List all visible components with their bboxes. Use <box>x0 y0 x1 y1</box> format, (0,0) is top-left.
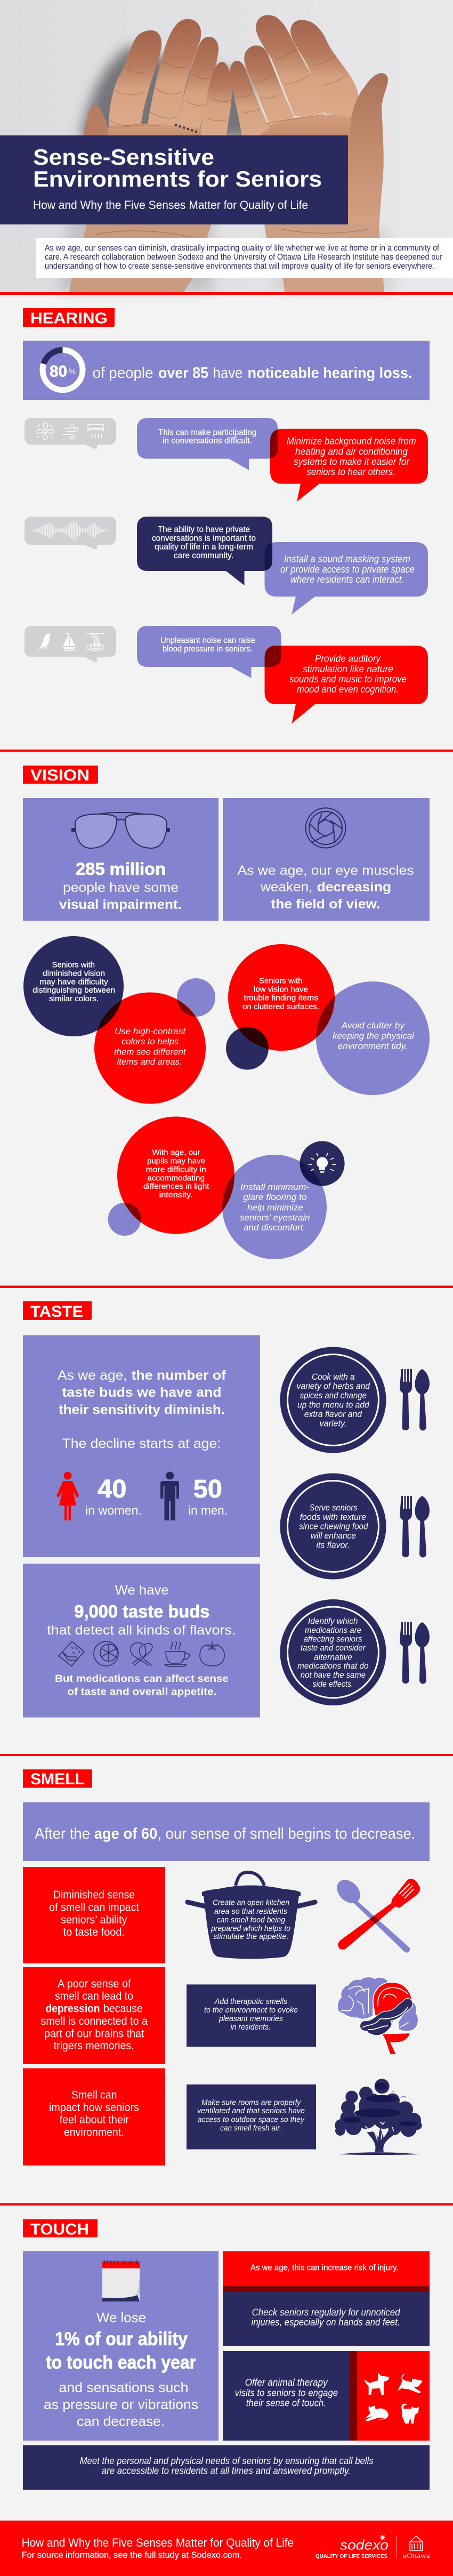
text: diminished vision: diminished vision <box>43 969 105 978</box>
panel: 1 percent per year: as pressure or vibrations <box>44 2396 198 2412</box>
stat: 50 in men: in men. <box>188 1503 228 1517</box>
text: diminished vision: may have difficulty <box>39 977 109 986</box>
logo: uOttawa: uOttawa <box>403 2551 430 2559</box>
box: ventilated rooms: access to outdoor space so they <box>198 2115 305 2124</box>
ring chart 80%: 80 <box>50 363 67 381</box>
plate: identify medications: affecting seniors <box>304 1635 362 1644</box>
circle: decorative navy <box>226 1027 269 1069</box>
panel: taste bud decline: the number of <box>132 1368 226 1383</box>
box: depression: because <box>103 2002 143 2015</box>
box: environment: Smell can <box>71 2089 117 2102</box>
panel: field of view: decreasing <box>317 880 391 895</box>
conversation 3 <box>137 626 428 723</box>
speech bubble: minimize background noise: systems to make it easier for <box>294 456 410 467</box>
panel: 9,000 taste buds: of taste and overall appetite. <box>67 1687 216 1697</box>
speech bubble: conversations difficult: in conversations difficult. <box>163 436 252 446</box>
text: avoid clutter: keeping the physical <box>333 1031 415 1041</box>
icon bubble: sound wave <box>25 517 116 550</box>
speech bubble: unpleasant noise <box>137 626 281 678</box>
icon: sunglasses <box>71 812 170 848</box>
plate: serve foods with texture: will enhance <box>311 1531 356 1541</box>
text: low vision: on cluttered surfaces. <box>242 1002 319 1011</box>
photo: aged hands <box>0 0 453 292</box>
box: environment: feel about their <box>60 2114 129 2126</box>
panel: taste bud decline: As we age, <box>58 1368 127 1383</box>
speech bubble: minimize background noise: heating and air conditioning <box>295 446 408 457</box>
box: depression: depression <box>46 2002 100 2015</box>
panel: field of view <box>223 798 430 921</box>
text: low vision <box>242 977 319 1011</box>
panel: call bells: Meet the personal and physical needs of seniors by ensuring that call bells <box>80 2456 374 2466</box>
speech bubble: auditory stimulation: Provide auditory <box>315 653 382 664</box>
panel: check seniors <box>223 2292 430 2346</box>
text: diminished vision: distinguishing between <box>33 986 115 995</box>
plate: cook with herbs: up the menu to add <box>297 1400 369 1410</box>
icon: aperture <box>306 808 345 848</box>
circle: decorative periwinkle <box>177 978 215 1017</box>
text: high-contrast colors: them see different <box>114 1047 187 1057</box>
text: minimum-glare flooring: glare flooring to <box>243 1192 307 1202</box>
panel: 9,000 taste buds <box>23 1564 260 1718</box>
box: taste food: seniors’ ability <box>61 1914 127 1926</box>
panel: taste bud decline: The decline starts at age: <box>62 1436 221 1451</box>
text: minimum-glare flooring: and discomfort. <box>244 1222 305 1233</box>
circle: high-contrast colors <box>94 993 206 1104</box>
stat: 50 in men <box>188 1475 228 1517</box>
box: environment: environment. <box>64 2127 124 2139</box>
ring chart 80% <box>43 350 83 390</box>
plate: identify medications: Identify which <box>308 1617 358 1626</box>
panel: 1 percent per year: can decrease. <box>77 2413 165 2429</box>
panel: risk of injury: As we age, this can increase risk of injury. <box>250 2264 399 2273</box>
stat: 40 in women: in women. <box>85 1503 142 1517</box>
pot with text: area so that residents <box>214 1907 287 1916</box>
circle: pupils <box>117 1116 234 1234</box>
plate: identify medications: taste and consider <box>301 1644 366 1653</box>
section: vision <box>23 766 430 1259</box>
box: depression: part of our brains that <box>44 2027 144 2040</box>
speech bubble: auditory stimulation: mood and even cognition. <box>297 683 399 695</box>
hero section <box>0 0 453 295</box>
logo: sodexo <box>316 2535 389 2559</box>
speech bubble: private conversations <box>137 517 272 585</box>
panel: 285 million: 285 million <box>76 859 166 879</box>
plate: serve foods with texture: foods with texture <box>300 1512 366 1522</box>
plate: cook with herbs: Cook with a <box>312 1372 355 1382</box>
text: high-contrast colors <box>114 1026 187 1067</box>
panel: 1 percent per year: and sensations such <box>59 2379 189 2395</box>
circle: bulb background <box>300 1141 345 1186</box>
footer source: For source information, see the full study at Sodexo.com. <box>22 2550 242 2560</box>
section: smell <box>23 1769 430 2166</box>
conversation 2 <box>137 517 428 614</box>
box: therapeutic smells: Add theraputic smells <box>214 1997 287 2006</box>
panel: 9,000 taste buds: that detect all kinds of flavors. <box>47 1623 236 1638</box>
banner: age of 60: , our sense of smell begins to decrease. <box>157 1825 415 1842</box>
conversation 1 <box>137 418 428 502</box>
speech bubble: private conversations: conversations is important to <box>152 534 256 543</box>
text: pupils: more difficulty in <box>146 1165 206 1174</box>
icon: brain <box>337 1977 418 2055</box>
panel: animal therapy: visits to seniors to engage <box>235 2387 338 2398</box>
text: pupils: With age, our <box>152 1148 200 1157</box>
panel: taste bud decline: taste buds we have and <box>62 1385 222 1400</box>
box: ventilated rooms: Make sure rooms are properly <box>201 2098 301 2107</box>
box: therapeutic smells: to the environment to evoke <box>204 2006 298 2015</box>
icon: fork and spoon <box>400 1369 430 1431</box>
icon: calendar <box>102 2260 140 2301</box>
banner: age of 60: After the <box>35 1825 90 1842</box>
panel: call bells <box>23 2445 430 2490</box>
text: high-contrast colors: Use high-contrast <box>115 1026 186 1036</box>
panel: 1 percent per year <box>23 2251 219 2441</box>
speech bubble: conversations difficult: This can make participating <box>158 428 256 437</box>
panel: 9,000 taste buds: But medications can affect sense <box>55 1673 229 1685</box>
plate: serve foods with texture: since chewing food <box>299 1522 368 1531</box>
text: pupils <box>143 1148 209 1200</box>
icon bubble: bird, sailboat, waterfall <box>25 626 116 663</box>
bubble cluster: color contrast <box>23 936 215 1104</box>
plate: identify medications: side effects. <box>312 1680 353 1689</box>
stat: 40 in women <box>85 1475 142 1517</box>
icons: chocolate, orange, pretzel, tea, tomato <box>59 1641 224 1667</box>
text: diminished vision: Seniors with <box>52 961 95 969</box>
speech bubble: sound masking: Install a sound masking system <box>284 553 410 564</box>
plate: cook with herbs <box>280 1347 386 1453</box>
plate: identify medications: not have the same <box>301 1671 366 1680</box>
logo: sodexo: sodexo <box>340 2537 389 2553</box>
icon: tree <box>335 2079 422 2155</box>
panel: risk of injury <box>223 2251 430 2292</box>
stat: 50 in men: 50 <box>193 1475 222 1503</box>
circle: minimum-glare flooring <box>222 1155 327 1259</box>
intro text block <box>36 238 453 278</box>
title panel <box>0 135 348 224</box>
ring chart 80%: % <box>69 367 76 375</box>
panel: animal therapy: their sense of touch. <box>246 2398 326 2409</box>
plate: identify medications <box>280 1599 386 1705</box>
pot with text: Create an open kitchen <box>213 1898 289 1907</box>
stat banner: 80 percent: of people <box>93 365 153 382</box>
text: avoid clutter <box>333 1020 415 1051</box>
plate: cook with herbs: variety. <box>320 1419 346 1429</box>
section: hearing <box>23 308 430 723</box>
speech bubble: private conversations: The ability to have private <box>158 525 250 534</box>
text: low vision: trouble finding items <box>244 993 318 1002</box>
section: touch <box>23 2219 430 2490</box>
footer title: How and Why the Five Senses Matter for Quality of Life <box>22 2536 294 2549</box>
box: ventilated rooms <box>187 2084 316 2150</box>
speech bubble: auditory stimulation: stimulation like nature <box>303 663 393 674</box>
icon: man <box>160 1471 179 1520</box>
panel: 1 percent per year: 1% of our ability <box>55 2329 188 2349</box>
speech bubble: auditory stimulation <box>264 646 428 723</box>
title: Environments for Seniors <box>33 166 322 191</box>
text: diminished vision <box>33 961 115 1003</box>
text: minimum-glare flooring: seniors’ eyestrain <box>240 1213 310 1223</box>
panel: taste bud decline <box>23 1335 260 1557</box>
plate: serve foods with texture: Serve seniors <box>309 1503 357 1512</box>
box: taste food: to taste food. <box>63 1926 125 1938</box>
plate: serve foods with texture <box>280 1474 386 1579</box>
panel: 9,000 taste buds: 9,000 taste buds <box>74 1601 209 1621</box>
box: taste food <box>23 1867 165 1963</box>
speech bubble: private conversations: quality of life in a long-term <box>155 543 253 551</box>
speech bubble: conversations difficult <box>137 418 278 470</box>
stat banner: 80 percent: over 85 <box>158 365 208 382</box>
circle: decorative periwinkle small <box>108 1203 141 1236</box>
box: depression: smell is connected to a <box>41 2015 148 2027</box>
speech bubble: minimize background noise: Minimize background noise from <box>287 436 416 447</box>
title: Sense-Sensitive <box>33 144 214 170</box>
box: therapeutic smells <box>187 1984 316 2047</box>
plate: cook with herbs: extra flavor and <box>304 1410 362 1419</box>
panel: check seniors: Check seniors regularly for unnoticed <box>252 2307 401 2318</box>
speech bubble: minimize background noise <box>270 429 428 502</box>
panel: 285 million: people have some <box>63 880 179 895</box>
text: pupils: pupils may have <box>147 1157 205 1165</box>
speech bubble: auditory stimulation: sounds and music to improve <box>289 673 407 685</box>
heading: taste <box>23 1301 92 1321</box>
box: taste food: of smell can impact <box>49 1902 139 1914</box>
text: low vision: low vision have <box>254 985 308 994</box>
box: therapeutic smells: in residents. <box>230 2023 271 2032</box>
icon: fork and spoon 3 <box>400 1622 430 1684</box>
speech bubble: sound masking: where residents can interact. <box>290 574 404 585</box>
stat banner: 80 percent: have <box>213 365 243 382</box>
text: diminished vision: similar colors. <box>49 994 99 1003</box>
icons: dogs and cats <box>365 2373 423 2424</box>
text: minimum-glare flooring: Install minimum- <box>240 1182 310 1192</box>
stat banner: 80 percent: noticeable hearing loss. <box>247 365 412 382</box>
panel: 9,000 taste buds: We have <box>115 1583 169 1598</box>
heading: touch: TOUCH <box>30 2221 89 2238</box>
icon: woman <box>56 1471 79 1520</box>
panel: call bells: are accessible to residents at all times and answered promptly. <box>102 2466 351 2476</box>
text: minimum-glare flooring: help minimize <box>247 1203 303 1212</box>
panel: taste bud decline: their sensitivity diminish. <box>59 1403 225 1418</box>
plate: serve foods with texture: its flavor. <box>317 1540 350 1550</box>
box: environment: impact how seniors <box>49 2102 139 2114</box>
heading: taste: TASTE <box>30 1303 83 1321</box>
heading: vision <box>23 766 98 784</box>
text: minimum-glare flooring <box>240 1182 310 1233</box>
panel: check seniors: injuries, especially on hands and feet. <box>252 2317 400 2328</box>
box: depression <box>23 1967 165 2064</box>
plate: cook with herbs: spices and change <box>300 1391 367 1400</box>
banner: age of 60 <box>23 1802 430 1861</box>
bubble cluster: clutter <box>226 944 430 1095</box>
banner: age of 60: age of 60 <box>94 1825 157 1842</box>
plate: identify medications: medications are <box>305 1626 361 1635</box>
title <box>33 144 322 191</box>
icon: spoon and spatula <box>333 1875 420 1953</box>
box: depression: A poor sense of <box>58 1978 131 1990</box>
text: avoid clutter: environment tidy. <box>338 1041 408 1051</box>
subtitle: How and Why the Five Senses Matter for Quality of Life <box>33 198 308 212</box>
panel: 285 million: visual impairment. <box>59 897 182 912</box>
panel: 1 percent per year: to touch each year <box>46 2352 196 2373</box>
heading: smell: SMELL <box>30 1770 85 1788</box>
text: pupils: differences in light <box>143 1182 209 1191</box>
stat banner: 80 percent <box>23 341 430 400</box>
box: ventilated rooms: can smell fresh air. <box>220 2123 281 2132</box>
icon: fork and spoon 2 <box>400 1496 430 1558</box>
panel: 285 million <box>23 798 219 921</box>
circle: avoid clutter <box>316 981 430 1095</box>
box: environment <box>23 2068 165 2166</box>
panel: field of view: the field of view. <box>271 897 380 912</box>
text: high-contrast colors: colors to helps <box>122 1036 179 1046</box>
pot with text: can smell food being <box>216 1915 286 1925</box>
circle: diminished vision <box>23 936 124 1036</box>
plate: cook with herbs: variety of herbs and <box>297 1382 370 1391</box>
circle: low vision <box>228 944 335 1051</box>
pot with text <box>188 1872 315 1959</box>
logo: uOttawa <box>403 2536 430 2559</box>
box: taste food: Diminished sense <box>53 1889 135 1901</box>
speech bubble: unpleasant noise: Unpleasant noise can raise <box>160 636 255 645</box>
panel: field of view: As we age, our eye muscles <box>238 863 414 878</box>
logo: sodexo: QUALITY OF LIFE SERVICES <box>316 2553 387 2559</box>
panel: 1 percent per year: We lose <box>96 2309 146 2325</box>
box: therapeutic smells: pleasant memories <box>219 2014 283 2023</box>
heading: vision: VISION <box>30 767 90 784</box>
text: high-contrast colors: items and areas. <box>117 1057 182 1067</box>
icon: light bulb <box>309 1153 336 1172</box>
panel: field of view: weaken, <box>260 880 312 895</box>
plate: identify medications: medications that do <box>297 1662 369 1671</box>
text: low vision: Seniors with <box>259 977 303 985</box>
speech bubble: sound masking: or provide access to private space <box>280 564 415 575</box>
plate: identify medications: alternative <box>314 1653 352 1662</box>
box: depression: trigers memories. <box>54 2040 134 2052</box>
section: taste <box>23 1301 430 1718</box>
pot with text: prepared which helps to <box>211 1924 290 1933</box>
text: pupils: intensity. <box>159 1190 193 1200</box>
speech bubble: sound masking <box>264 542 428 614</box>
speech bubble: unpleasant noise: blood pressure in seniors. <box>163 645 253 654</box>
bubble cluster: light and glare <box>108 1116 345 1259</box>
pot with text: stimulate the appetite. <box>213 1932 289 1941</box>
speech bubble: private conversations: care community. <box>174 551 233 560</box>
box: depression: smell can lead to <box>55 1990 133 2002</box>
box: ventilated rooms: ventilated and that seniors have <box>197 2106 305 2115</box>
speech bubble: minimize background noise: seniors to hear others. <box>307 466 395 477</box>
stat: 40 in women: 40 <box>98 1475 126 1503</box>
footer <box>0 2521 453 2576</box>
icon bubble: fan, wind, air conditioner <box>25 418 116 449</box>
heading: hearing: HEARING <box>30 310 108 327</box>
panel: animal therapy: Offer animal therapy <box>245 2377 328 2388</box>
text: pupils: accommodating <box>147 1173 205 1182</box>
text: avoid clutter: Avoid clutter by <box>341 1020 406 1031</box>
panel: animal therapy <box>223 2351 430 2441</box>
